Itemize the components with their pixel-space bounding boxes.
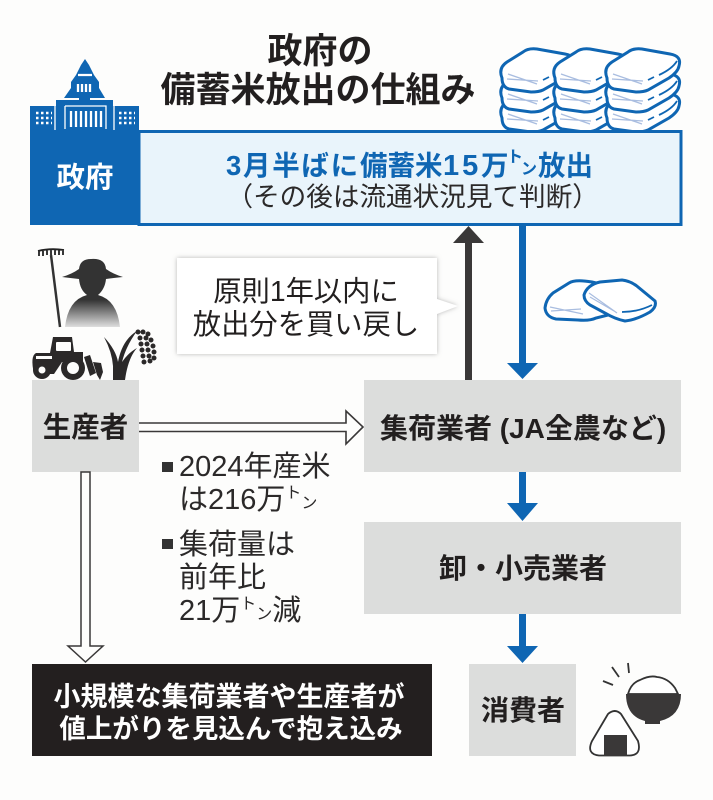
icon: tractor: [32, 337, 103, 380]
text: 2024 harvest and collection notes: 前年比: [179, 561, 266, 594]
text: 2024 harvest and collection notes: 2024年産米: [179, 450, 331, 483]
text: 2024 harvest and collection notes: ト: [285, 485, 301, 502]
icon: farmer with rake: [38, 249, 123, 327]
text: subsequent decision: （その後は流通状況見て判断）: [226, 182, 599, 212]
title: 備蓄米放出の仕組み: [160, 71, 476, 110]
icon: Diet building with government label box: [30, 59, 139, 225]
text: 2024 harvest and collection notes: ン: [301, 495, 317, 512]
icon: rice bowl and onigiri: [590, 663, 681, 756]
callout: buyback rule: 放出分を買い戻し: [193, 308, 419, 340]
box: consumers: 消費者: [481, 695, 565, 726]
title: [160, 32, 476, 110]
callout: hoarding by small collectors and producers: 小規模な集荷業者や生産者が: [54, 681, 404, 712]
text: 2024 harvest and collection notes: [162, 450, 331, 627]
box: collectors: [364, 380, 681, 472]
panel heading: release amount: ン: [521, 161, 537, 178]
callout: hoarding by small collectors and producers: [32, 664, 432, 756]
text: 2024 harvest and collection notes: 21万: [179, 595, 240, 627]
title: 政府の: [267, 32, 373, 71]
text: 2024 harvest and collection notes: は216万: [179, 484, 285, 516]
panel heading: release amount: 放出: [538, 150, 593, 181]
box: producers: 生産者: [43, 412, 128, 444]
panel heading: release amount: [226, 149, 593, 182]
callout: buyback rule: [177, 258, 458, 354]
box: producers: [32, 380, 139, 472]
panel heading: release amount: ト: [507, 149, 523, 166]
text: 2024 harvest and collection notes: 集荷量は: [179, 528, 295, 561]
arrow: wholesalers to consumers: [507, 614, 538, 663]
icon: two rice bags: [545, 280, 655, 321]
arrow: release down to collectors: [507, 225, 538, 379]
text: 2024 harvest and collection notes: 減: [272, 594, 301, 627]
box: consumers: [469, 664, 576, 756]
box: collectors: 集荷業者 (JA全農など): [380, 413, 666, 444]
text: 2024 harvest and collection notes: ト: [240, 596, 256, 613]
text: 2024 harvest and collection notes: ン: [256, 606, 272, 623]
arrow: collectors to wholesalers: [507, 472, 538, 521]
label: government: 政府: [56, 162, 114, 194]
panel heading: release amount: 備蓄米: [360, 150, 442, 181]
callout: hoarding by small collectors and producers: 値上がりを見込んで抱え込み: [59, 714, 403, 744]
panel heading: release amount: 15: [443, 150, 481, 182]
arrow: producers to hoarding: [68, 472, 103, 662]
panel: government release: [139, 132, 681, 224]
arrow: producers to collectors: [139, 411, 363, 444]
box: wholesalers and retailers: 卸・小売業者: [439, 553, 607, 584]
icon: stacked rice bags: [501, 49, 680, 132]
arrow: buy back up to government: [453, 226, 484, 380]
callout: buyback rule: 原則1年以内に: [213, 275, 399, 307]
panel heading: release amount: 万: [481, 150, 508, 181]
icon: rice plant: [104, 330, 156, 380]
box: wholesalers and retailers: [364, 522, 681, 614]
panel heading: release amount: 3月半ばに: [226, 150, 360, 181]
